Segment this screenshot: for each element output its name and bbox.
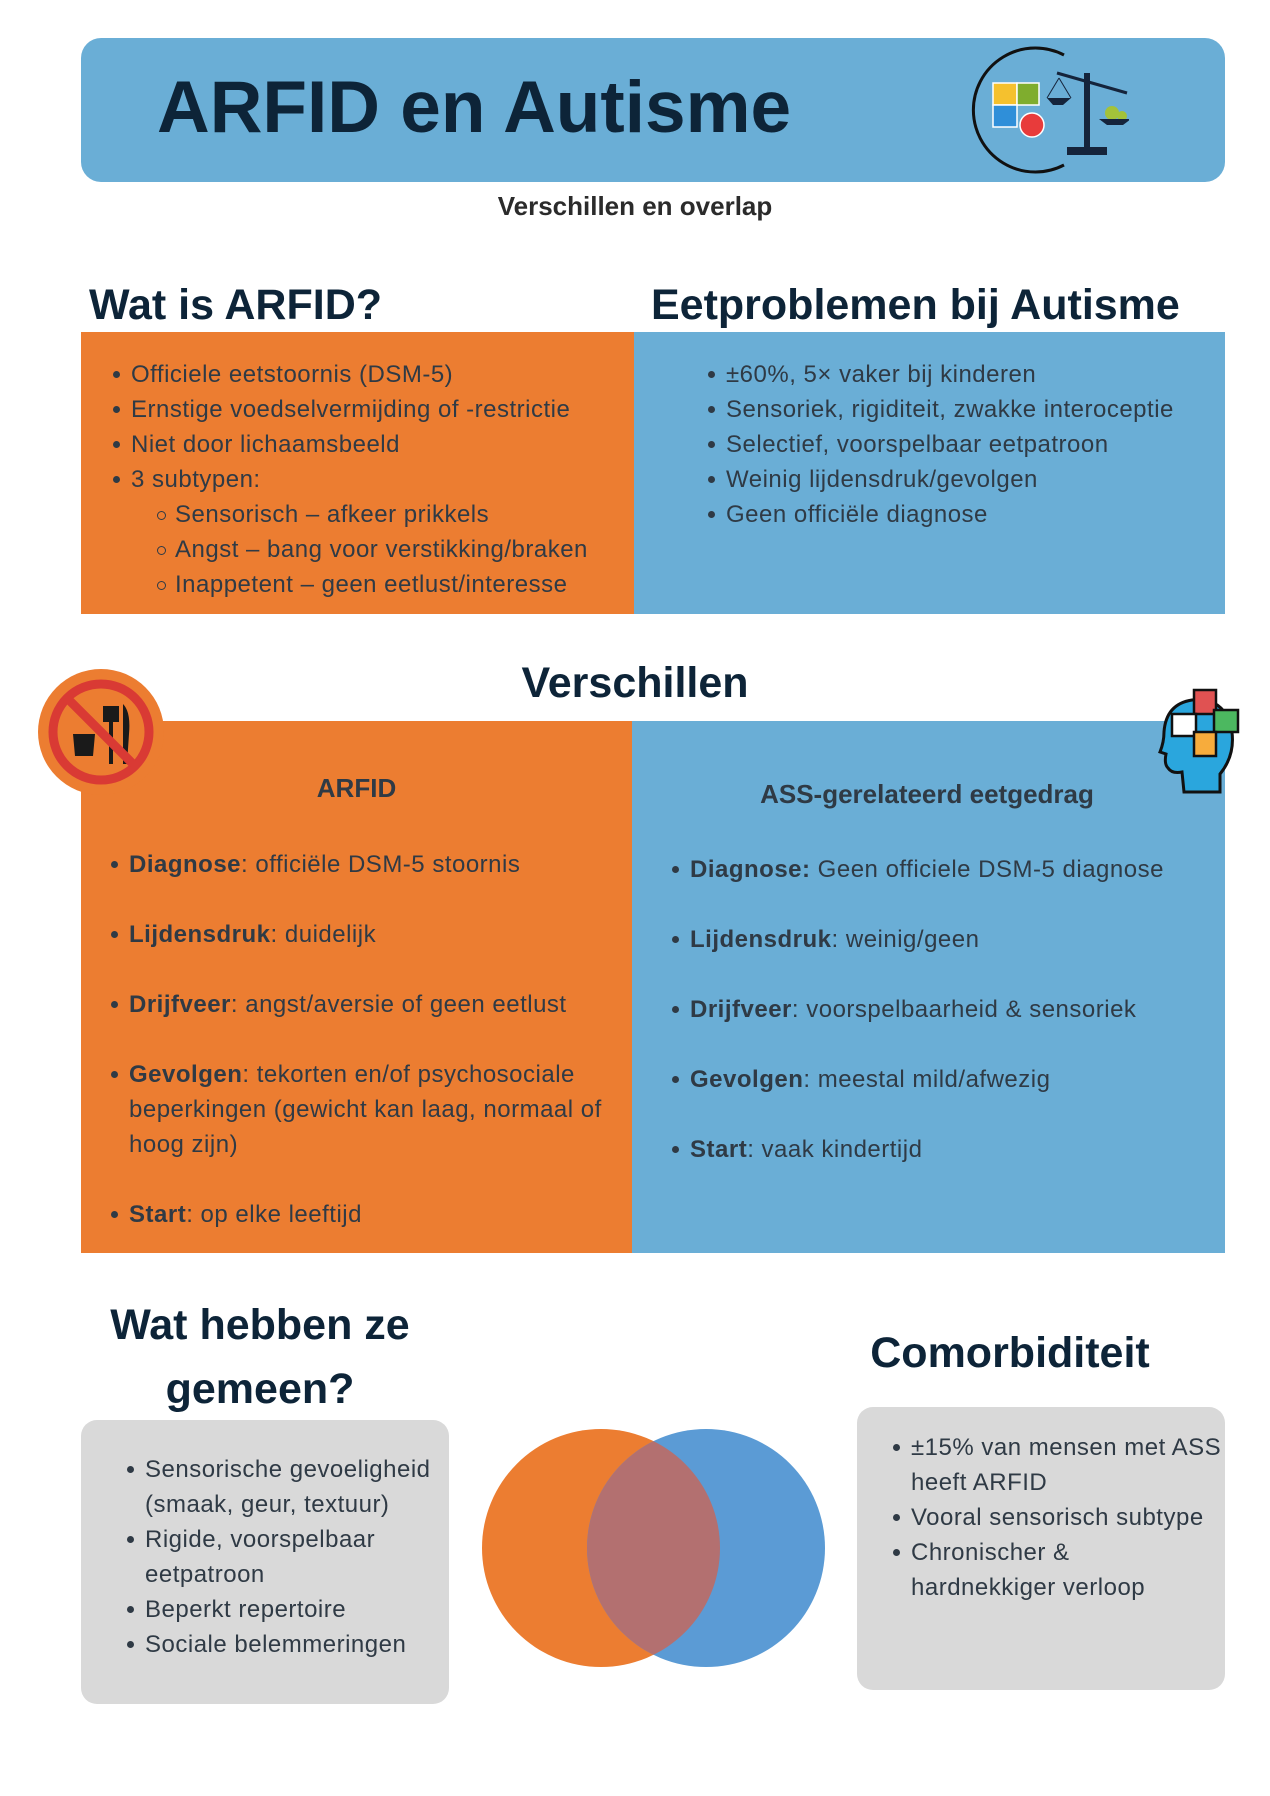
list: autism eating: Selectief, voorspelbaar eetpatroon xyxy=(726,431,1109,458)
panel: comorbiditeit xyxy=(857,1407,1225,1690)
list: autism eating: Geen officiële diagnose xyxy=(726,501,988,528)
panel: ARFID differences xyxy=(81,721,632,1253)
panel: gemeen xyxy=(81,1420,449,1704)
list: ASS differences: Drijfveer: voorspelbaarheid & sensoriek xyxy=(690,996,1136,1023)
heading: Comorbiditeit: Comorbiditeit xyxy=(870,1329,1150,1377)
list: ARFID facts: Niet door lichaamsbeeld xyxy=(131,431,400,458)
list: comorbidity: Chronischer & xyxy=(911,1539,1070,1566)
title: ARFID en Autisme xyxy=(157,67,791,148)
heading: Wat hebben ze gemeen: Wat hebben ze xyxy=(110,1301,410,1349)
heading: Wat hebben ze gemeen: gemeen? xyxy=(166,1365,354,1413)
subheading ARFID: ARFID xyxy=(317,773,396,803)
list: autism eating xyxy=(708,361,1174,528)
subtitle: Verschillen en overlap xyxy=(498,191,772,221)
heading: Eetproblemen bij Autisme: Eetproblemen bij Autisme xyxy=(651,281,1180,329)
venn diagram xyxy=(482,1429,825,1667)
list: ARFID facts: Inappetent – geen eetlust/interesse xyxy=(175,571,567,598)
list: ARFID facts: 3 subtypen: xyxy=(131,466,261,493)
panel: Eetproblemen bij Autisme xyxy=(634,332,1225,614)
header bar xyxy=(81,38,1225,182)
list: comorbidity: ±15% van mensen met ASS heeft ARFID xyxy=(911,1434,1221,1496)
list: ARFID facts: Officiele eetstoornis (DSM-5) xyxy=(131,361,453,388)
list: comorbidity xyxy=(893,1434,1221,1601)
list: ASS differences: Diagnose: Geen officiele DSM-5 diagnose xyxy=(690,856,1164,883)
list: ARFID differences: Start: op elke leeftijd xyxy=(129,1201,362,1228)
list: ASS differences xyxy=(672,856,1164,1163)
list: ASS differences: Gevolgen: meestal mild/afwezig xyxy=(690,1066,1050,1093)
icon: puzzle and scale xyxy=(972,46,1129,174)
icon: head with puzzle xyxy=(1158,688,1240,794)
list: overlap: Beperkt repertoire xyxy=(145,1596,346,1623)
subheading ASS: ASS-gerelateerd eetgedrag xyxy=(760,779,1094,809)
list: overlap: Sociale belemmeringen xyxy=(145,1631,406,1658)
list: ARFID facts: Sensorisch – afkeer prikkels xyxy=(175,501,489,528)
list: ARFID differences: Lijdensdruk: duidelijk xyxy=(129,921,376,948)
list: comorbidity: hardnekkiger verloop xyxy=(911,1574,1145,1601)
list: ARFID differences xyxy=(111,851,602,1228)
list: comorbidity: Vooral sensorisch subtype xyxy=(911,1504,1204,1531)
list: autism eating: Sensoriek, rigiditeit, zwakke interoceptie xyxy=(726,396,1174,423)
list: ASS differences: Lijdensdruk: weinig/geen xyxy=(690,926,979,953)
list: ARFID differences: Drijfveer: angst/aversie of geen eetlust xyxy=(129,991,567,1018)
list: overlap xyxy=(127,1456,431,1658)
panel: Wat is ARFID xyxy=(81,332,634,614)
heading: Wat is ARFID: Wat is ARFID? xyxy=(89,281,382,329)
list: overlap: Rigide, voorspelbaar eetpatroon xyxy=(145,1526,375,1588)
list: ARFID differences: Diagnose: officiële DSM-5 stoornis xyxy=(129,851,520,878)
icon: no eating sign xyxy=(38,669,163,792)
list: ARFID facts: Angst – bang voor verstikking/braken xyxy=(175,536,588,563)
list: autism eating: ±60%, 5× vaker bij kinderen xyxy=(726,361,1036,388)
list: overlap: Sensorische gevoeligheid (smaak, geur, textuur) xyxy=(145,1456,431,1518)
list: autism eating: Weinig lijdensdruk/gevolgen xyxy=(726,466,1038,493)
list: ARFID facts: Ernstige voedselvermijding of -restrictie xyxy=(131,396,570,423)
panel: ASS differences xyxy=(632,721,1225,1253)
list: ARFID facts xyxy=(113,361,588,598)
heading: Wat hebben ze gemeen xyxy=(110,1301,410,1413)
heading: Verschillen: Verschillen xyxy=(521,659,749,707)
list: ASS differences: Start: vaak kindertijd xyxy=(690,1136,922,1163)
list: ARFID differences: Gevolgen: tekorten en/of psychosociale beperkingen (gewicht kan laag, normaal of hoog zijn) xyxy=(129,1061,602,1158)
